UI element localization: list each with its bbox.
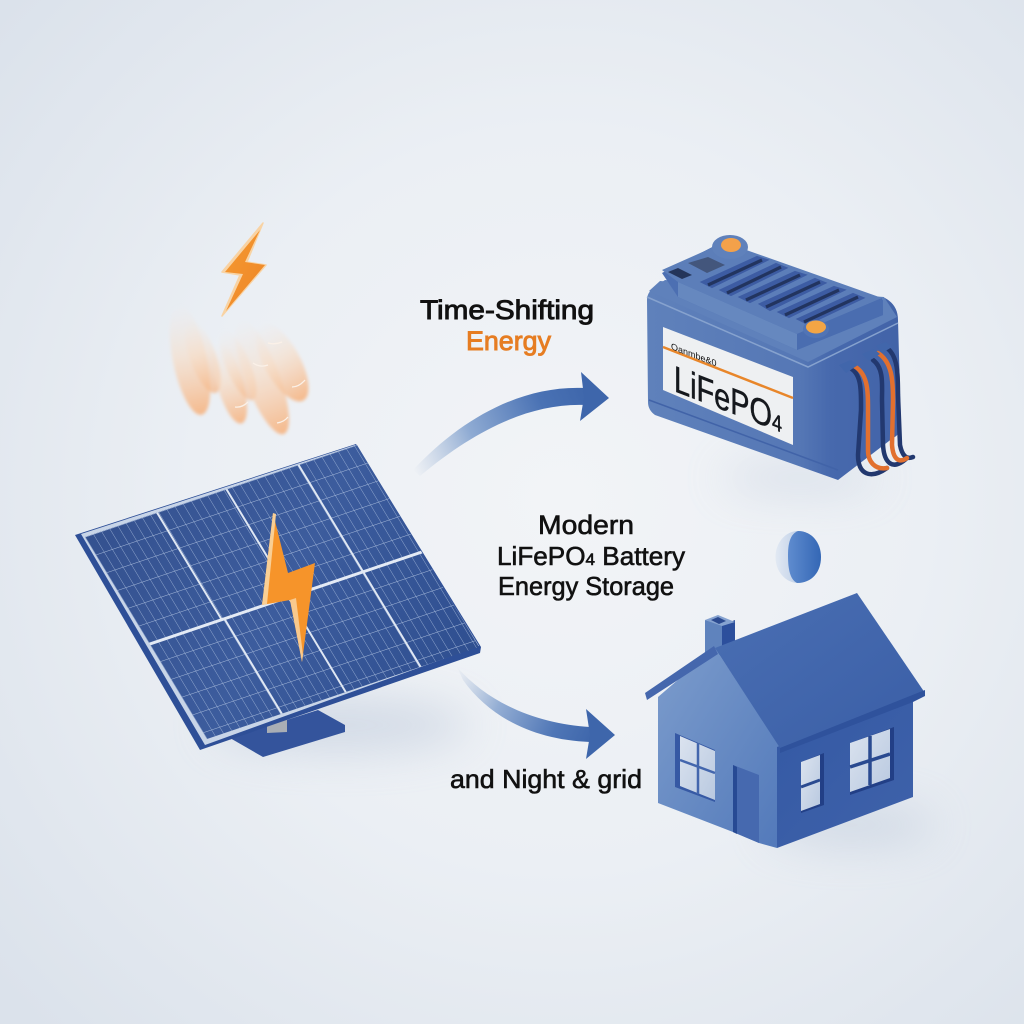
icon: small lightning bolt bbox=[222, 223, 266, 316]
panel: LiFePO4 battery bbox=[647, 235, 913, 480]
icon: fading energy streaks bbox=[162, 302, 319, 440]
solar panel light border bbox=[81, 445, 479, 745]
roof front edge bbox=[645, 646, 718, 700]
battery terminal front bbox=[803, 320, 829, 338]
panel: solar panel bbox=[75, 444, 481, 757]
text block: Modern LiFePO4 Battery Energy Storage: Energy Storage bbox=[498, 571, 674, 601]
solar panel stand bbox=[230, 710, 345, 757]
battery small port bbox=[668, 268, 692, 279]
battery body bbox=[647, 280, 901, 480]
roof bbox=[715, 593, 925, 748]
window side small bbox=[801, 753, 824, 813]
icon: moon bbox=[776, 531, 821, 583]
battery cables bbox=[850, 348, 913, 474]
battery top face bbox=[649, 281, 897, 362]
door bbox=[733, 765, 759, 843]
heading: Time-Shifting: Time-Shifting bbox=[420, 295, 594, 325]
heading: Energy: Energy bbox=[466, 326, 551, 356]
label small text: Oanmbe&0 bbox=[671, 341, 716, 368]
label LiFePO4: LiFePO4 bbox=[674, 358, 782, 441]
window side large bbox=[850, 727, 894, 795]
battery label bbox=[663, 327, 793, 445]
battery vent slots bbox=[702, 257, 863, 324]
battery terminal back bbox=[712, 235, 748, 259]
battery lid bbox=[662, 242, 883, 350]
gable wall bbox=[658, 648, 782, 848]
solar panel cells bbox=[85, 445, 479, 739]
battery display bbox=[688, 257, 725, 273]
label orange line bbox=[663, 347, 793, 398]
battery cable ports bbox=[839, 342, 892, 373]
chimney bbox=[705, 615, 735, 655]
caption: and Night & grid: and Night & grid bbox=[450, 764, 642, 794]
solar panel frame bbox=[75, 444, 481, 750]
text block: Modern LiFePO4 Battery Energy Storage: Modern bbox=[538, 510, 634, 540]
panel: house bbox=[645, 593, 925, 848]
text block: Modern LiFePO4 Battery Energy Storage: LiFePO4 Battery bbox=[497, 541, 685, 571]
arrow: solar to house bbox=[457, 667, 615, 759]
icon: big lightning bolt on panel bbox=[262, 513, 315, 662]
shadows under objects bbox=[210, 466, 935, 845]
side wall bbox=[777, 700, 913, 848]
window front bbox=[675, 733, 715, 802]
text block: Modern LiFePO4 Battery Energy Storage bbox=[497, 510, 685, 601]
arrow: solar to battery bbox=[413, 372, 609, 476]
